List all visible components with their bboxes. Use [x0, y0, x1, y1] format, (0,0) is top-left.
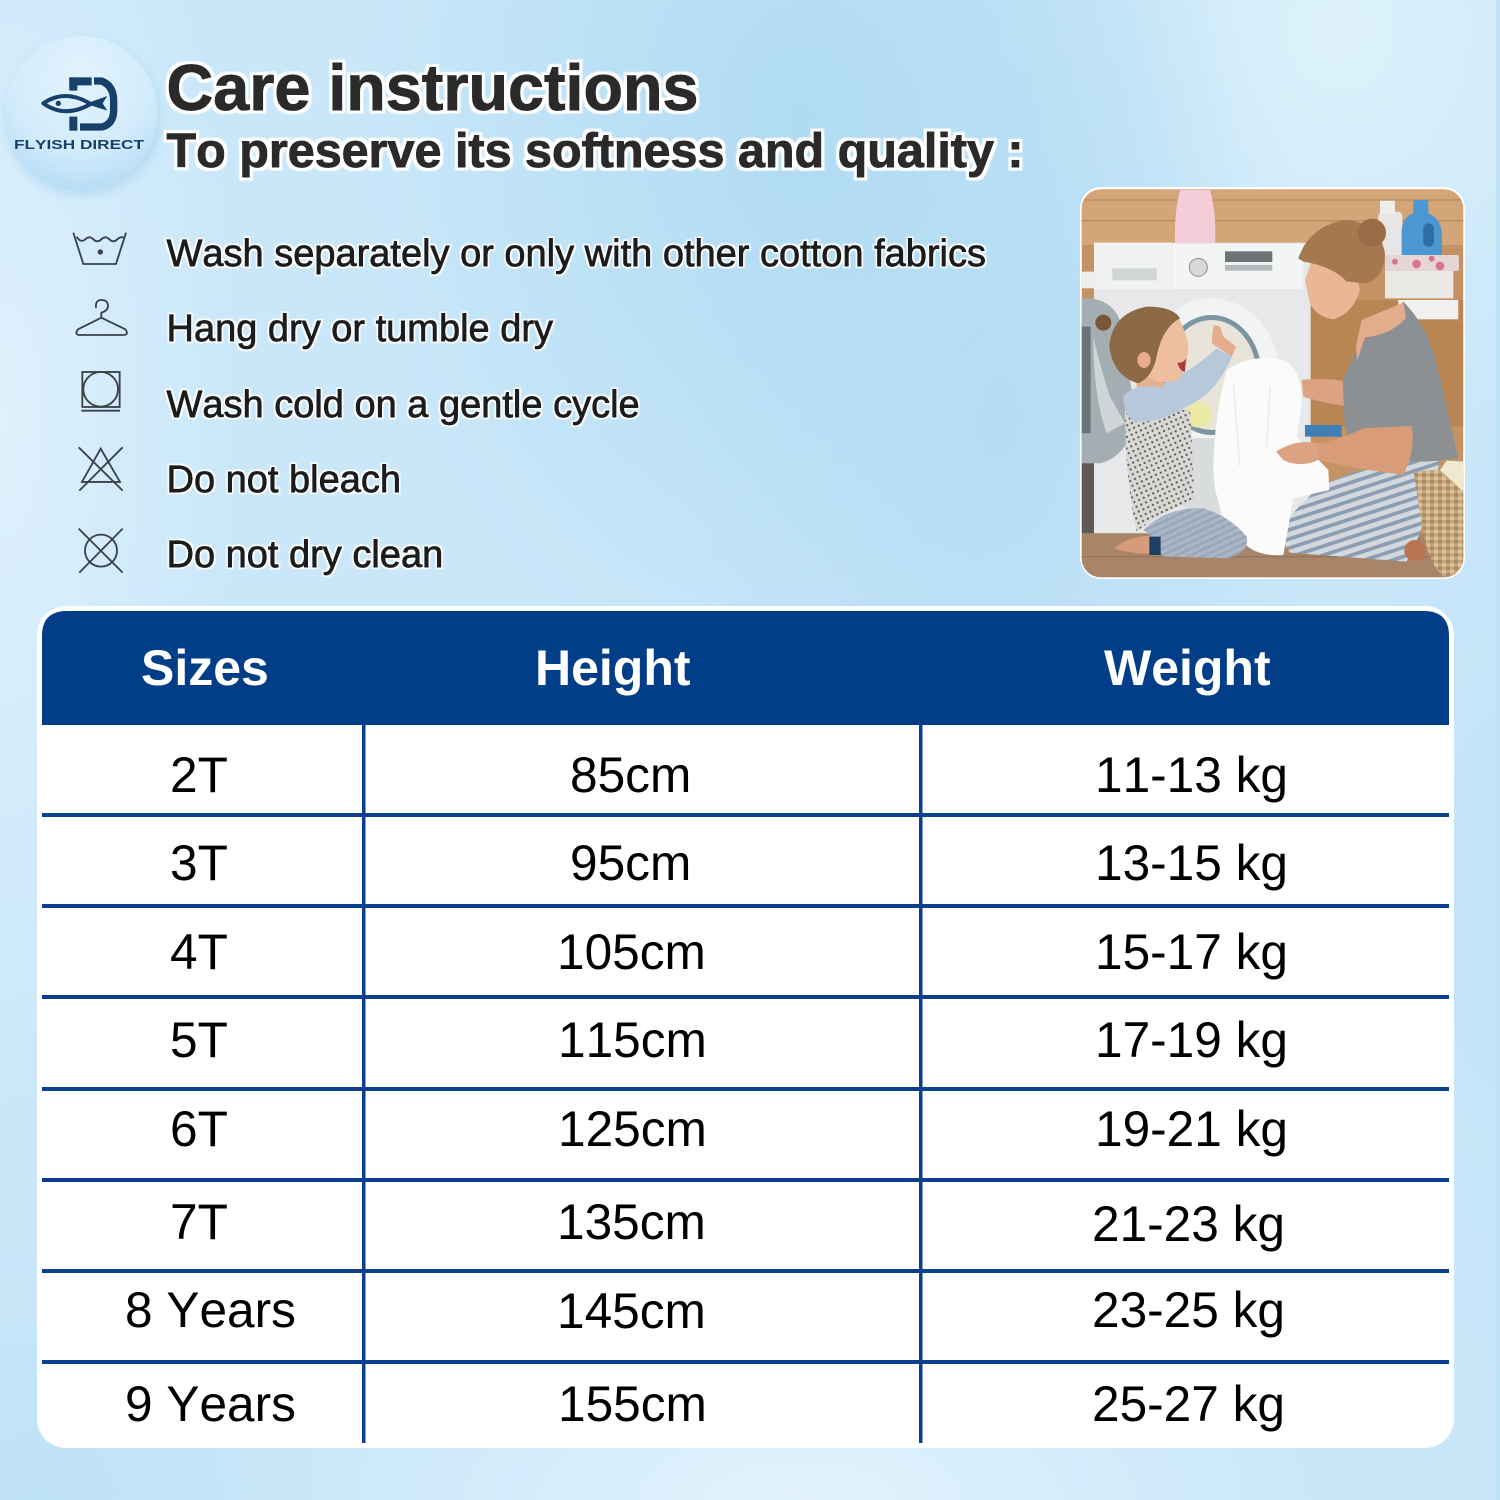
row 6T: 125cm: [558, 1101, 707, 1157]
hand on towel: [1276, 442, 1318, 464]
logo badge: [4, 36, 161, 196]
wall: [1082, 188, 1463, 578]
shelf basket: [1385, 270, 1453, 298]
row 8 Years: [125, 1282, 1285, 1339]
size table: [37, 606, 1454, 1448]
row 6T: 19-21 kg: [1095, 1101, 1288, 1157]
row 4T: [170, 924, 1288, 980]
child: [1095, 307, 1247, 558]
row 7T: 7T: [170, 1194, 228, 1250]
header: sizes: Sizes: [141, 640, 269, 696]
row 4T: 15-17 kg: [1095, 924, 1288, 980]
header: height: Height: [535, 640, 691, 696]
row 9 Years: 155cm: [558, 1376, 707, 1432]
drum opening: [1174, 298, 1278, 438]
title: Care instructions: [166, 51, 698, 124]
legs: [1282, 455, 1440, 562]
care list: [73, 233, 986, 576]
icon: wash basin: [73, 233, 126, 264]
row 3T: 95cm: [570, 835, 691, 891]
table header: [42, 611, 1449, 725]
neck: [1136, 376, 1164, 387]
icon: no dry clean: [79, 529, 123, 573]
right edge strip: [1496, 0, 1500, 1500]
face: [1145, 313, 1188, 382]
row 7T: 21-23 kg: [1092, 1196, 1285, 1252]
row 8 Years: 8 Years: [125, 1282, 296, 1338]
bottles: [1175, 190, 1215, 243]
text: no bleach: Do not bleach: [166, 459, 401, 501]
face: [1305, 257, 1360, 319]
neck and chest: [1356, 303, 1406, 360]
row 6T: 6T: [170, 1101, 228, 1157]
subtitle: To preserve its softness and quality :: [166, 124, 1024, 178]
row 5T: 5T: [170, 1012, 228, 1068]
text: hang dry: Hang dry or tumble dry: [166, 308, 553, 350]
row 2T: 11-13 kg: [1095, 747, 1288, 803]
machine: [1094, 243, 1311, 533]
logo mark: fish and D: [43, 77, 114, 131]
table grid: [42, 725, 1449, 1443]
pants: [1143, 508, 1247, 558]
towel: [1213, 358, 1329, 555]
open door: [1082, 298, 1137, 463]
row 3T: [170, 835, 1288, 891]
row 4T: 4T: [170, 924, 228, 980]
text: wash cold: Wash cold on a gentle cycle: [166, 384, 640, 426]
row 9 Years: 9 Years: [125, 1376, 296, 1432]
arm back: [1302, 378, 1344, 406]
row 5T: [170, 1012, 1288, 1068]
row 2T: 2T: [170, 747, 228, 803]
row 6T: [170, 1101, 1288, 1157]
photo: mother and child doing laundry: [1080, 187, 1465, 579]
icon: no bleach: [79, 447, 123, 491]
mother: [1282, 219, 1458, 562]
header: weight: Weight: [1104, 640, 1271, 696]
row 2T: 85cm: [570, 747, 691, 803]
hair: [1298, 220, 1385, 283]
table panel: [37, 606, 1454, 1448]
text: no dry clean: Do not dry clean: [166, 534, 443, 576]
icon: tumble square: [81, 372, 120, 411]
row 5T: 17-19 kg: [1095, 1012, 1288, 1068]
logo wordmark: FLYISH DIRECT: [14, 138, 144, 152]
torso: [1343, 302, 1458, 462]
row 7T: [170, 1194, 1285, 1252]
row 8 Years: 145cm: [557, 1283, 706, 1339]
row 9 Years: [125, 1376, 1285, 1432]
towels behind: [1305, 425, 1342, 437]
row 9 Years: 25-27 kg: [1092, 1376, 1285, 1432]
laundry basket: [1414, 470, 1463, 577]
hand: [1212, 325, 1236, 357]
icon: hanger: [76, 300, 127, 335]
row 5T: 115cm: [558, 1012, 707, 1068]
forearm and upper arm: [1318, 426, 1413, 475]
floor: [1082, 533, 1463, 578]
row 8 Years: 23-25 kg: [1092, 1282, 1285, 1338]
row 3T: 13-15 kg: [1095, 835, 1288, 891]
sleeve: [1123, 348, 1232, 422]
text: wash separately: Wash separately or only with other cotton fabrics: [166, 233, 986, 275]
hair: [1109, 307, 1180, 383]
row 2T: [170, 747, 1288, 803]
torso: [1125, 410, 1194, 532]
row 4T: 105cm: [557, 924, 706, 980]
row 3T: 3T: [170, 835, 228, 891]
row 7T: 135cm: [557, 1194, 706, 1250]
